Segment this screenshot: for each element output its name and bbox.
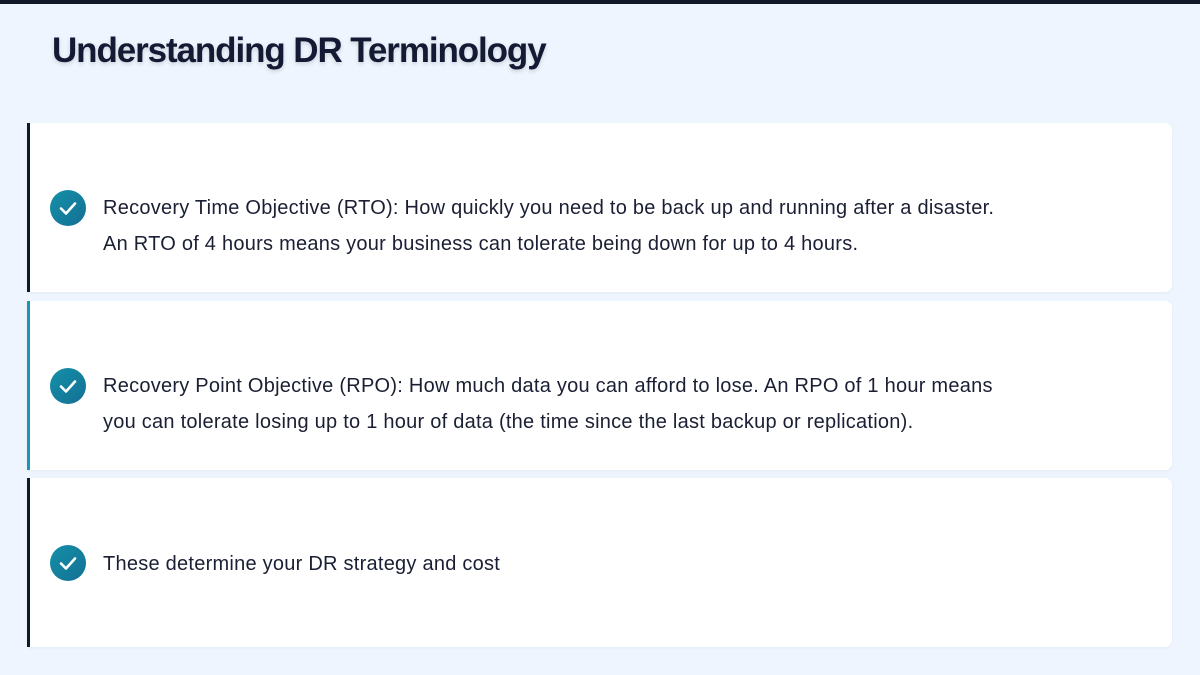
text: RTO: An RTO of 4 hours means your business can tolerate being down for up to 4 hours. bbox=[103, 233, 858, 255]
icon: check bbox=[50, 368, 86, 404]
title: Understanding DR Terminology bbox=[52, 31, 546, 70]
text: RPO: you can tolerate losing up to 1 hour of data (the time since the last backup or replication). bbox=[103, 411, 913, 433]
text: strategy: These determine your DR strategy and cost bbox=[103, 553, 500, 575]
icon: check bbox=[50, 190, 86, 226]
panel: RTO bbox=[27, 123, 1172, 292]
text: RPO bbox=[103, 375, 993, 433]
text: RTO: Recovery Time Objective (RTO): How quickly you need to be back up and running after a disaster. bbox=[103, 197, 994, 219]
text: RPO: Recovery Point Objective (RPO): How much data you can afford to lose. An RPO of 1 hour means bbox=[103, 375, 993, 397]
icon: check bbox=[50, 545, 86, 581]
panel: RPO bbox=[27, 301, 1172, 470]
panel: strategy bbox=[27, 478, 1172, 647]
text: RTO bbox=[103, 197, 994, 255]
